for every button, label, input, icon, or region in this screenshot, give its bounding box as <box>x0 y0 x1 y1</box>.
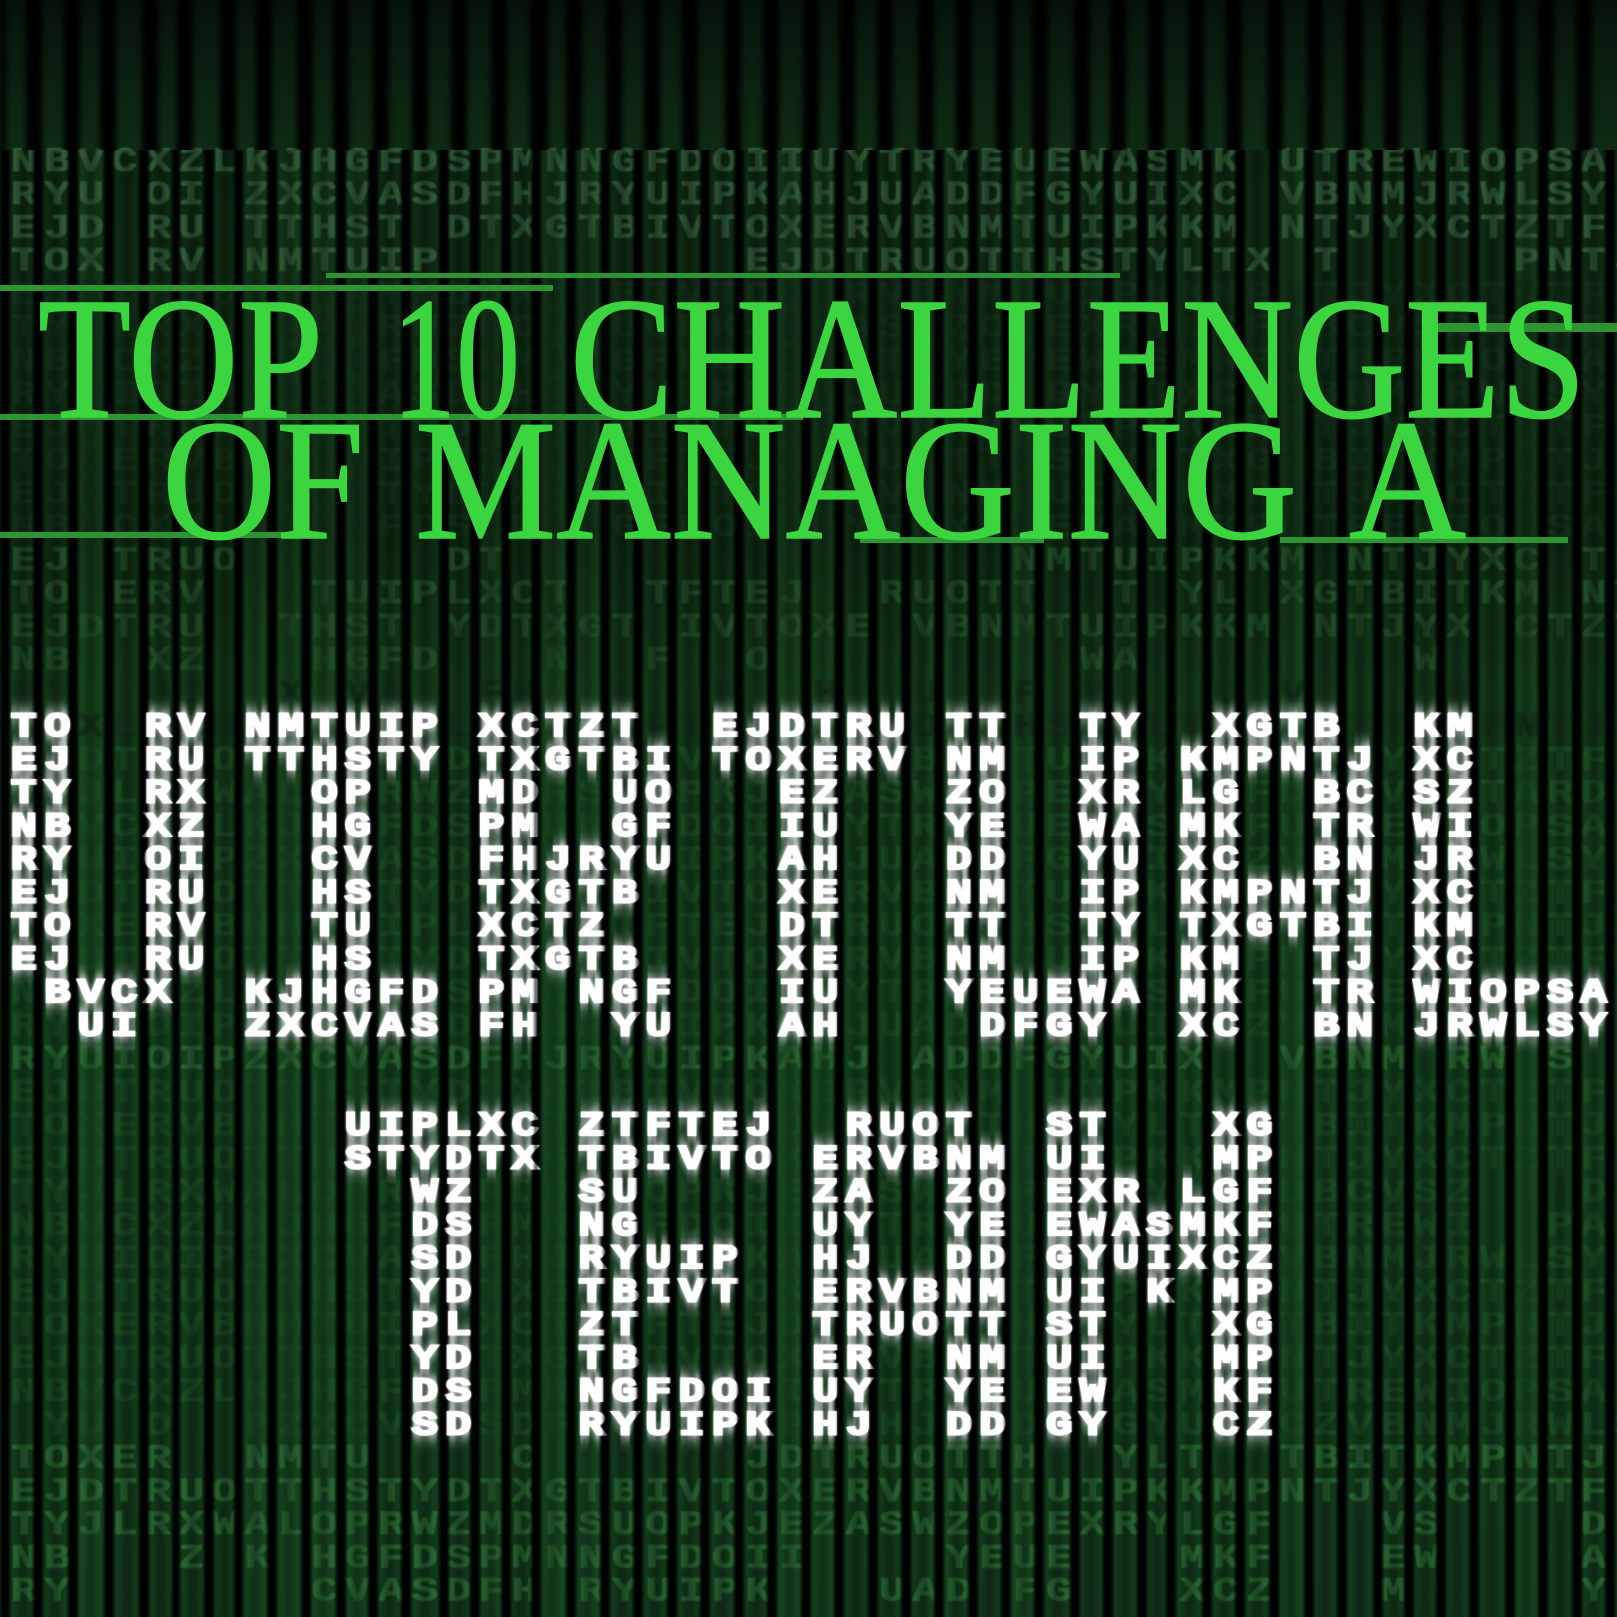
background letter grid: EJDTRUOTTHSTYDTXGTBIVTOXERVBNMTUIPKKMPNTJYXCTZTF <box>11 1340 1614 1378</box>
glow bands behind VIRTUAL TEAM letters: NB XZ HG PM GF IU YE WA MK TR WI <box>11 808 1480 846</box>
pixel word: VIRTUAL TEAM in white letters: YD TBIVT ERVBNM UI K MP <box>11 1273 1280 1312</box>
background letter grid: NBVCXZLKJHGFDSPMNNGFDOIIUYTRYEUEWASMKFUTREWI PA <box>11 1207 1614 1245</box>
pixel word: VIRTUAL TEAM in white letters: NB XZ HG PM GF IU YE WA MK TR WI <box>11 808 1480 846</box>
glow bands behind VIRTUAL TEAM letters: TY RX OP MD UO EZ ZO XR LG BC SZ <box>11 774 1480 813</box>
background letter grid: NB Z K HGFDSPMNNGFDOII YEUE MKF EW A <box>11 1539 1614 1578</box>
background letter grid: TOXERVBNMTUIPLXCTZTFTEJDTRUOTTHSTYLTXGTBITKMPNTJ <box>11 708 1614 747</box>
background letter grid: NBVCXZLKJHGFDSPMNNGFDOIIUYTRYEUEWASMKFUTREWIOPSA <box>11 508 1614 547</box>
background letter grid: TYJLRXWALOPRWZMDRSUOPKJEZASWZOPEXRYLGFDBCVSZTARD <box>11 309 1614 348</box>
background letter grid: TOXER NMTU C JDTRUOTTH YLT TBITKMPNTJ <box>11 1439 1614 1478</box>
title line 1: 10 <box>392 262 520 455</box>
background letter grid: RY CVASDFH RYUIPK UAD FG XCZ M Y <box>11 1572 1614 1611</box>
background letter grid: RYUIOIPZXCVASDFHJRYUIPKAHJUADDFGYUIXCZVBNMJRWLSY <box>11 375 1614 414</box>
background letter grid: EJD RU TTHST DTXGTBIVTOXERVBNMTUIPKKM NTJYXCTZTF <box>11 209 1614 248</box>
pixel word: VIRTUAL TEAM in white letters: EJ RU TTHSTY TXGTBI TOXERV NM IP KMPNTJ XC <box>11 741 1480 780</box>
background letter grid: TOXERVBNMTUIPLXCTZTFTEJDTRUOTTHSTYLTXGTBITKMPNTJ <box>11 1306 1614 1345</box>
pixel word: VIRTUAL TEAM in white letters: EJ RU HS TXGTB XE NM IP KM TJ XC <box>11 941 1480 979</box>
pixel word: VIRTUAL TEAM in white letters: YD TB ER NM UI MP <box>11 1340 1280 1378</box>
glow bands behind VIRTUAL TEAM letters: YD TBIVT ERVBNM UI K MP <box>11 1273 1280 1312</box>
glow bands behind VIRTUAL TEAM letters: EJ RU HS TXGTB XE NM IP KM TJ XC <box>11 941 1480 979</box>
background letter grid: TOX RV NMTUIP EJDTRUOTTHSTYLTX T PNTJ <box>11 242 1617 281</box>
background letter grid: EJDTRUOTTHSTYDTXGTBIVTOXERVBNMTUIPKKMPNTJYXCTZTF <box>11 941 1614 979</box>
thin dark notches across white letters <box>36 690 1579 1460</box>
background letter grid: TYJLRXWALOPRWZMDRSUOPKJEZASWZOPEXRYLGFDBCVSZTARD <box>11 774 1614 813</box>
decorative title rules <box>0 273 1617 543</box>
background letter grid: EJDTRUOTTHSTYDTXGTBIVTOXERVBNMTUIPKKMPNTJYXCTZTF <box>11 1473 1614 1511</box>
pixel word: VIRTUAL TEAM in white letters: BVCX KJHGFD PM NGF IU YEUEWA MK TR WIOPSA <box>11 974 1614 1013</box>
background letter grid: NBVCXZLKJHGFDSPMNNGFDOIIUYTRYEUEWASMKFUTREWIOPSA <box>11 342 1614 381</box>
background letter grid: TYJLRXWALOPRWZMDRSUOPKJEZASWZOPEXRYLGFDBCVSZ D <box>11 1173 1614 1212</box>
pixel word: VIRTUAL TEAM in white letters: DS NGFDOI UY YE EW KF <box>11 1373 1280 1412</box>
background letter grid: RY OI X VA FH R P H U F Y C V R <box>11 675 1617 713</box>
title <box>38 262 1586 576</box>
glow bands behind VIRTUAL TEAM letters <box>11 708 1614 1445</box>
glow bands behind VIRTUAL TEAM letters: UIPLXC ZTFTEJ RUOT ST XG <box>11 1107 1280 1146</box>
pixel word: VIRTUAL TEAM in white letters: EJ RU HS TXGTB XE NM IP KMPNTJ XC <box>11 874 1480 913</box>
background letter grid: TYJLRXWALOPRWZMDRSUOPKJEZASWZOPEXRYLGF VS D <box>11 1506 1614 1545</box>
glow bands behind VIRTUAL TEAM letters: EJ RU HS TXGTB XE NM IP KMPNTJ XC <box>11 874 1480 913</box>
pixel word: VIRTUAL TEAM in white letters: SD RYUIPK HJ DD GY CZ <box>11 1406 1280 1445</box>
background letter grid: RYUIOIPZXCVASDFHJRYUIPKAHJUADDFGYUIXCZVBNMJRWLSY <box>11 1240 1614 1279</box>
background letter grid: NBVCXZLKJHGFDSPMNNGFDOIIUYTRYEUEWASMKFUTREWIOPSA <box>11 1373 1614 1412</box>
background letter grid: EJDTRUOTTHSTYDTXGTBIVTOXERVBNMTUIPKKMPNTJYXCTZTF <box>11 409 1614 447</box>
background letter grid: TOXERVBNMTUIPLXCTZTFTEJDTRUOTTHSTYLTXGTBITKMPNTJ <box>11 1107 1614 1146</box>
glow bands behind VIRTUAL TEAM letters: PL ZT TRUOTT ST XG <box>11 1306 1280 1345</box>
glow bands behind VIRTUAL TEAM letters: WZ SU ZA ZO EXR LGF <box>11 1173 1280 1212</box>
glow bands behind VIRTUAL TEAM letters: TO RV TU XCTZ DT TT TY TXGTBI KM <box>11 907 1480 946</box>
background letter grid: TO ERV TUIPLXCT TFTEJ RUOTT T YL XGTBITKM NT <box>11 575 1617 614</box>
title line 2: A <box>1349 386 1466 576</box>
background letter grid: NBVCXZLKJHGFDSPMNNGFDOIIUYTRYEUEWASMKFUTREWIOPSA <box>11 974 1614 1013</box>
background letter grid: NBVCXZLKJHGFDSPMNNGFDOIIUYTRYEUEWASMKFUTREWIOPSA <box>11 808 1614 846</box>
glow bands behind VIRTUAL TEAM letters: YD TB ER NM UI MP <box>11 1340 1280 1378</box>
glow bands behind VIRTUAL TEAM letters: DS NGFDOI UY YE EW KF <box>11 1373 1280 1412</box>
title line 2: OF <box>162 386 364 576</box>
title line 1: TOP <box>38 262 323 455</box>
glow bands behind VIRTUAL TEAM letters: RY OI CV FHJRYU AH DD YU XC BN JR <box>11 841 1480 880</box>
background letter grid: NB XZ HGFD N F O WA W <box>11 641 1617 680</box>
pixel word: VIRTUAL TEAM in white letters: UI ZXCVAS FH YU AH DFGY XC BN JRWLSY <box>11 1007 1614 1046</box>
background letter grid: EJDTRUOTTHSTYDTXGTBIVTOXERVBNMTUIPKKMPNTJYXCTZTF <box>11 741 1614 780</box>
pixel word: VIRTUAL TEAM in white letters: WZ SU ZA ZO EXR LGF <box>11 1173 1280 1212</box>
background letter grid: EJDTRUOTTHSTYDTXGTBIVTOXERVBNM UIPKKMPNTJYXCTZTF <box>11 1074 1614 1112</box>
pixel word: VIRTUAL TEAM in white letters: RY OI CV FHJRYU AH DD YU XC BN JR <box>11 841 1480 880</box>
pixel word: VIRTUAL TEAM in white letters: DS NG UY YE EWASMKF <box>11 1207 1280 1245</box>
glow bands behind VIRTUAL TEAM letters: SD RYUIPK HJ DD GY CZ <box>11 1406 1280 1445</box>
background letter grid: TOXERVBNMTUIPLXCTZTFTEJDTRUOTTHSTYLTXGTBITKMPNTJ <box>11 442 1614 481</box>
background letter grid: RYUIOIPZXCVASDFHJRYUIPKAHJUADDFGYUIXCZVBNMJRWLSY <box>11 1007 1614 1046</box>
background letter grid: EJ TRUO DT NMTUIPKKM NTJYXC TF <box>11 542 1617 580</box>
pixel word: VIRTUAL TEAM in white letters: TO RV NMTUIP XCTZT EJDTRU TT TY XGTB KM <box>11 708 1480 747</box>
background letter grid: TOXERVBNMTUIPLXCTZTFTEJDTRUOTTHSTYLTXGTBITKMPNTJ <box>11 907 1614 946</box>
background letter grid: EJDTRUOTTHSTYDTXGTBIVTOXERVBNMTUIPKKMPNTJYXCTZTF <box>11 475 1614 514</box>
background letter grid: RYUIOIPZXCVASDFHJRYUIPKAHJUADDFGYUIXCZVBNMJRWLSY <box>11 841 1614 880</box>
glow bands behind VIRTUAL TEAM letters: DS NG UY YE EWASMKF <box>11 1207 1280 1245</box>
pixel word: VIRTUAL TEAM in white letters: TO RV TU XCTZ DT TT TY TXGTBI KM <box>11 907 1480 946</box>
pixel word: VIRTUAL TEAM in white letters <box>11 708 1614 1445</box>
background letter grid: EJDTRUOTTHSTYDTXGTBIVTOXERVBNMTUIPKKMPNTJYXCTZTF <box>11 1273 1614 1312</box>
title line 1 <box>38 262 1586 455</box>
pixel word: VIRTUAL TEAM in white letters: SD RYUIP HJ DD GYUIXCZ <box>11 1240 1280 1279</box>
title line 2: MANAGING <box>415 386 1297 576</box>
pixel word: VIRTUAL TEAM in white letters: TY RX OP MD UO EZ ZO XR LG BC SZ <box>11 774 1480 813</box>
background letter grid: NBVCXZLKJHGFDSPMNNGFDOIIUYTRYEUEWASMK UTREWIOPSA <box>11 143 1614 181</box>
glow bands behind VIRTUAL TEAM letters: STYDTX TBIVTO ERVBNM UI MP <box>11 1140 1280 1179</box>
background letter grid: EJDTRUOTTHSTYDTXGTBIVTOXERVBNMTUIPKKMPNTJYXCTZTF <box>11 1140 1614 1179</box>
dark vertical bars: top band <box>0 0 1592 150</box>
glow bands behind VIRTUAL TEAM letters: SD RYUIP HJ DD GYUIXCZ <box>11 1240 1280 1279</box>
background letter grid: RYUIOIPZXCVASDFHJRYUIPKAHJ ADDFGYUIX VBNM RW S <box>11 1040 1617 1079</box>
glow bands behind VIRTUAL TEAM letters: BVCX KJHGFD PM NGF IU YEUEWA MK TR WIOPSA <box>11 974 1614 1013</box>
pixel word: VIRTUAL TEAM in white letters: PL ZT TRUOTT ST XG <box>11 1306 1280 1345</box>
glow bands behind VIRTUAL TEAM letters: UI ZXCVAS FH YU AH DFGY XC BN JRWLSY <box>11 1007 1614 1046</box>
background letter grid: EJDTRUOTTHSTYDTXGTBIVTOXERVBNMTUIPKKMPNTJYXCTZTF <box>11 276 1614 314</box>
glow bands behind VIRTUAL TEAM letters: TO RV NMTUIP XCTZT EJDTRU TT TY XGTB KM <box>11 708 1480 747</box>
background letter grid: EJDTRUOTTHSTYDTXGTBIVTOXERVBNMTUIPKKMPNTJYXCTZTF <box>11 874 1614 913</box>
pixel word: VIRTUAL TEAM in white letters: STYDTX TBIVTO ERVBNM UI MP <box>11 1140 1280 1179</box>
background letter grid: EJDTRU THST YDTXGT IVTOXE VBNMTUIPKKM NTJYX CTZT <box>11 608 1617 647</box>
background letter grid: RYU OI ZXCVASDFHJRYUIPKAHJUADDFGYUIXC VBNMJRWLSY <box>11 176 1614 215</box>
glow bands behind VIRTUAL TEAM letters: EJ RU TTHSTY TXGTBI TOXERV NM IP KMPNTJ XC <box>11 741 1480 780</box>
pixel word: VIRTUAL TEAM in white letters: UIPLXC ZTFTEJ RUOT ST XG <box>11 1107 1280 1146</box>
